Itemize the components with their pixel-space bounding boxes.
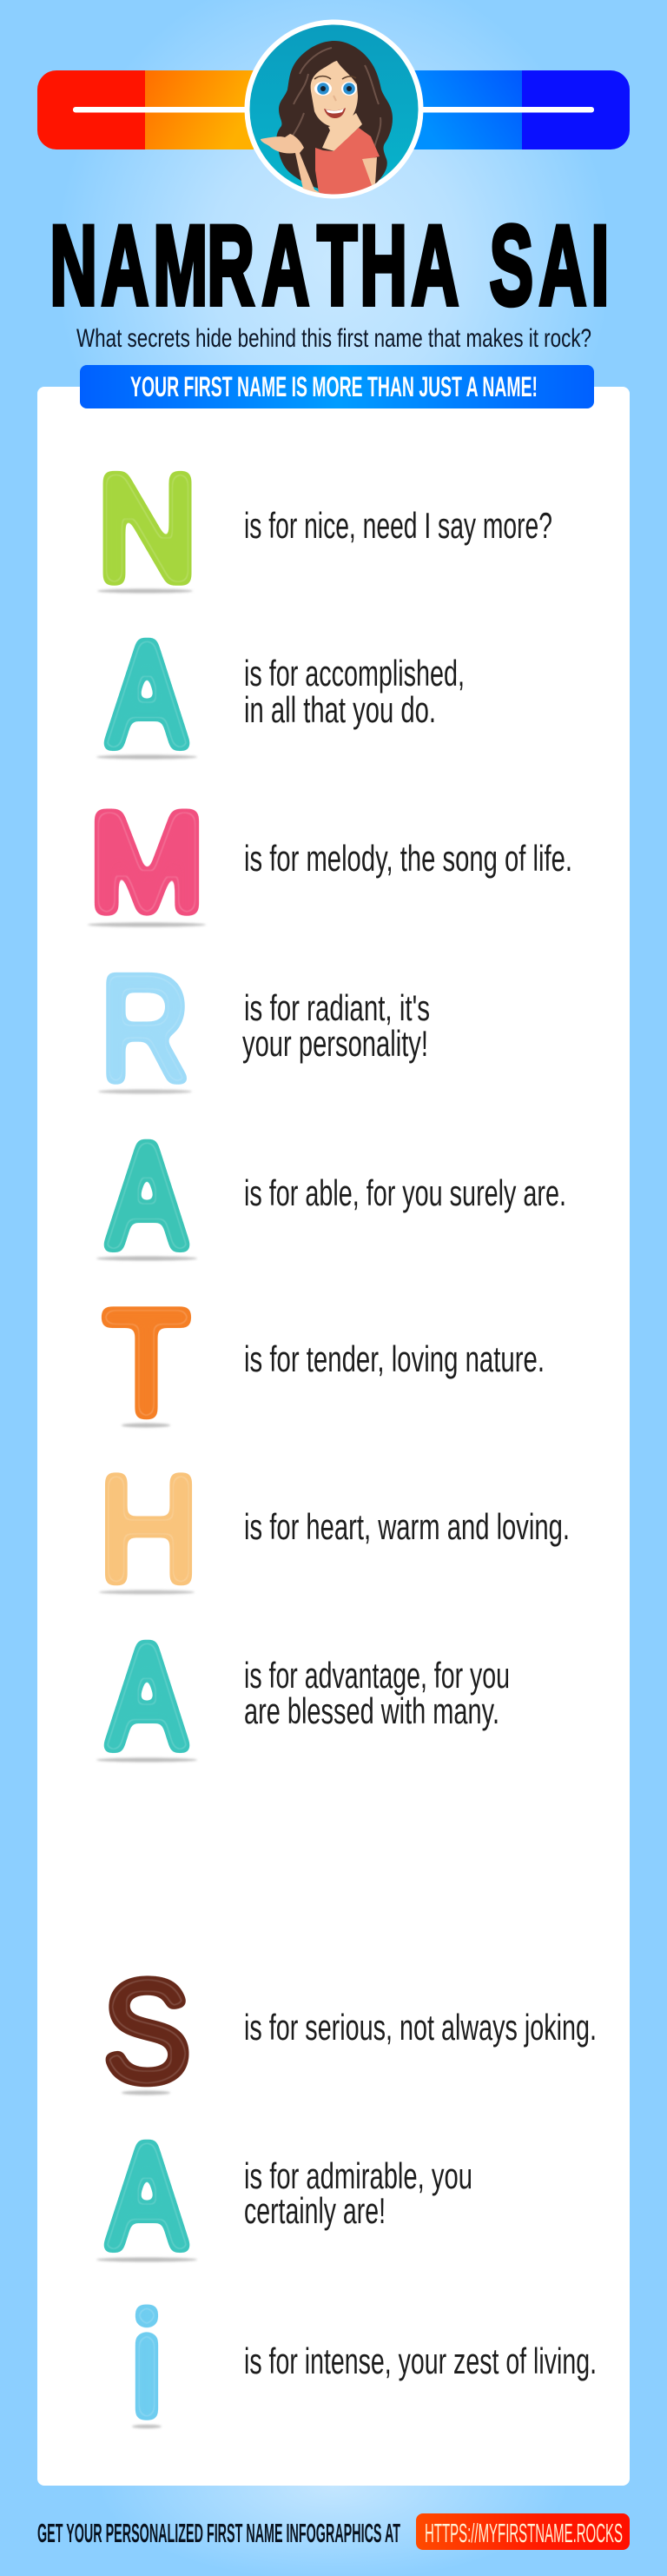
row: I <box>130 2283 597 2447</box>
portrait circle <box>247 23 420 196</box>
row: N <box>97 446 552 612</box>
white line across bar <box>73 107 594 113</box>
text: A lines <box>244 653 465 730</box>
text: A lines: is for accomplished, <box>244 653 465 694</box>
letter icon: R: R <box>100 945 190 1112</box>
row: M <box>88 786 572 939</box>
row: A <box>96 2115 472 2278</box>
row: S <box>102 1951 597 2112</box>
title: NAMRATHA SAI <box>50 202 609 329</box>
letter icon: i: i <box>130 2283 163 2447</box>
text: A lines: certainly are! <box>244 2190 386 2231</box>
text: A lines <box>244 2155 472 2231</box>
letter icon: A: A <box>108 2115 186 2278</box>
text: A lines: is for admirable, you <box>244 2155 472 2196</box>
text: T line: is for tender, loving nature. <box>244 1338 545 1379</box>
header colour bar <box>37 70 630 149</box>
portrait medallion <box>247 23 420 200</box>
text: A lines: is for advantage, for you <box>244 1655 510 1696</box>
letter icon: A: A <box>108 613 186 776</box>
text: R lines: is for radiant, it's <box>244 987 430 1028</box>
row: T <box>103 1279 545 1446</box>
text: R lines <box>242 987 430 1064</box>
text: A lines <box>244 1655 510 1731</box>
letter icon: T: T <box>103 1279 189 1446</box>
row: R <box>98 945 430 1112</box>
footer url button <box>416 2513 630 2550</box>
letter icon: H: H <box>98 1446 199 1613</box>
letter icon: A: A <box>108 1615 186 1778</box>
illustrated woman <box>261 41 393 200</box>
row: A <box>96 1615 510 1778</box>
letter icon: M: M <box>89 786 204 939</box>
row: A <box>96 613 465 776</box>
letter icon: N: N <box>97 446 197 612</box>
white content panel <box>37 387 630 2486</box>
banner <box>80 365 594 408</box>
text: A lines: are blessed with many. <box>244 1690 499 1731</box>
row: A <box>96 1114 566 1278</box>
text: A lines: in all that you do. <box>244 689 436 730</box>
letter icon: A: A <box>108 1114 186 1278</box>
letter icon: S: S <box>102 1951 191 2112</box>
row: H <box>98 1446 570 1613</box>
text: R lines: your personality! <box>242 1023 428 1064</box>
